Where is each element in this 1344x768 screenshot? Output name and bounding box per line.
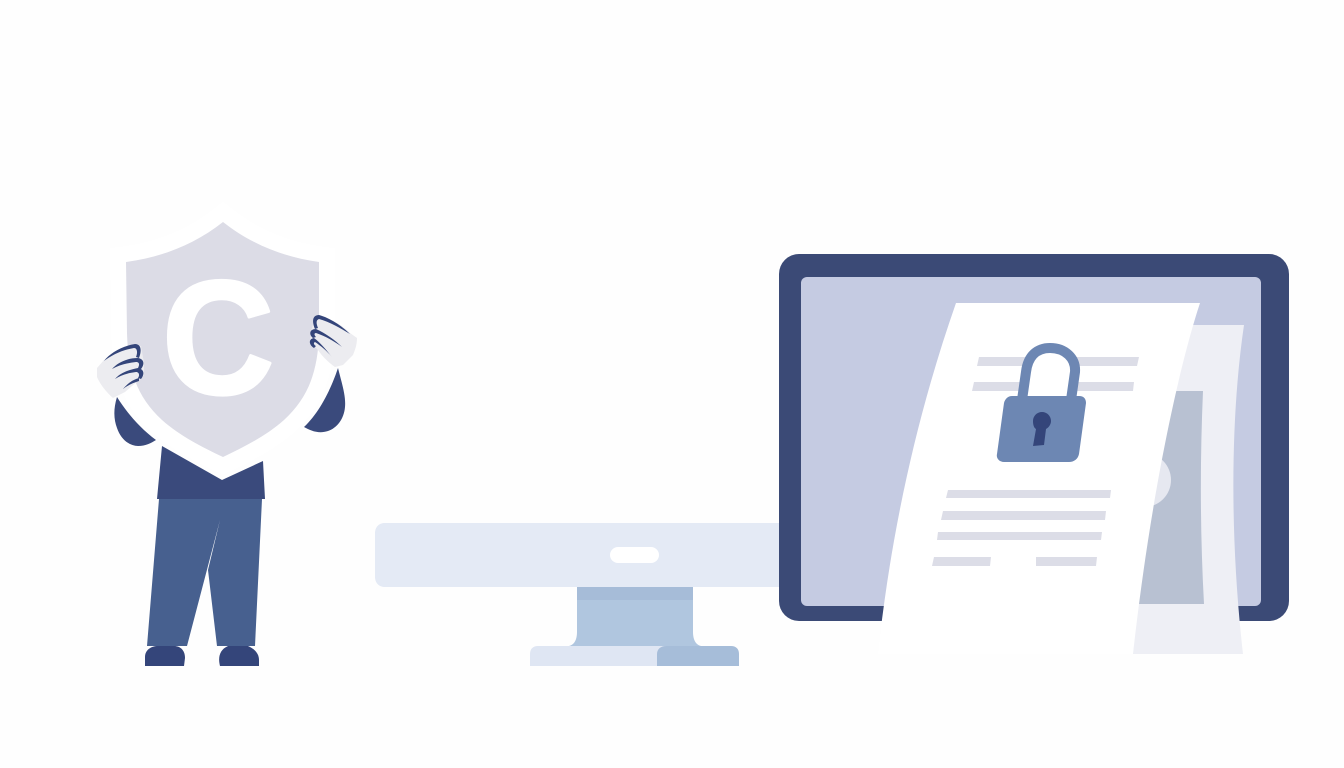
- left shoe: [145, 646, 185, 666]
- monitor stand: [375, 523, 785, 666]
- monitor: [779, 254, 1289, 621]
- back document: [1117, 325, 1244, 654]
- left arm: [114, 397, 156, 446]
- shackle: [1022, 348, 1075, 400]
- circle: [1117, 453, 1171, 507]
- padlock: [997, 348, 1086, 462]
- back page: [1125, 325, 1244, 654]
- trousers: [147, 499, 262, 646]
- right arm: [304, 368, 345, 432]
- page: [878, 303, 1200, 654]
- front document: [878, 303, 1200, 654]
- text line 6 left: [932, 557, 991, 566]
- white shield outline: [126, 222, 319, 457]
- monitor frame: [779, 254, 1289, 621]
- text line 4: [941, 511, 1106, 520]
- shirt: [157, 446, 265, 499]
- right hand: [310, 315, 357, 367]
- lock body: [997, 396, 1086, 462]
- monitor chin bar: [375, 523, 785, 587]
- stand neck: [569, 587, 701, 646]
- chin button: [610, 547, 659, 563]
- shield: [126, 222, 319, 457]
- grey panel: [1130, 391, 1204, 604]
- stand base right: [657, 646, 739, 666]
- left hand: [97, 344, 144, 398]
- text line 2: [972, 382, 1134, 391]
- figure holding copyright shield: [97, 222, 357, 666]
- right shoe: [219, 646, 259, 666]
- text line 6 right: [1036, 557, 1097, 566]
- stand neck shadow: [577, 587, 693, 600]
- copyright letter C: C: [162, 247, 274, 428]
- text line 5: [937, 532, 1102, 540]
- text line 3: [946, 490, 1111, 498]
- stand base left: [530, 646, 665, 666]
- monitor screen: [801, 277, 1261, 606]
- keyhole: [1033, 412, 1051, 446]
- text line 1: [977, 357, 1139, 366]
